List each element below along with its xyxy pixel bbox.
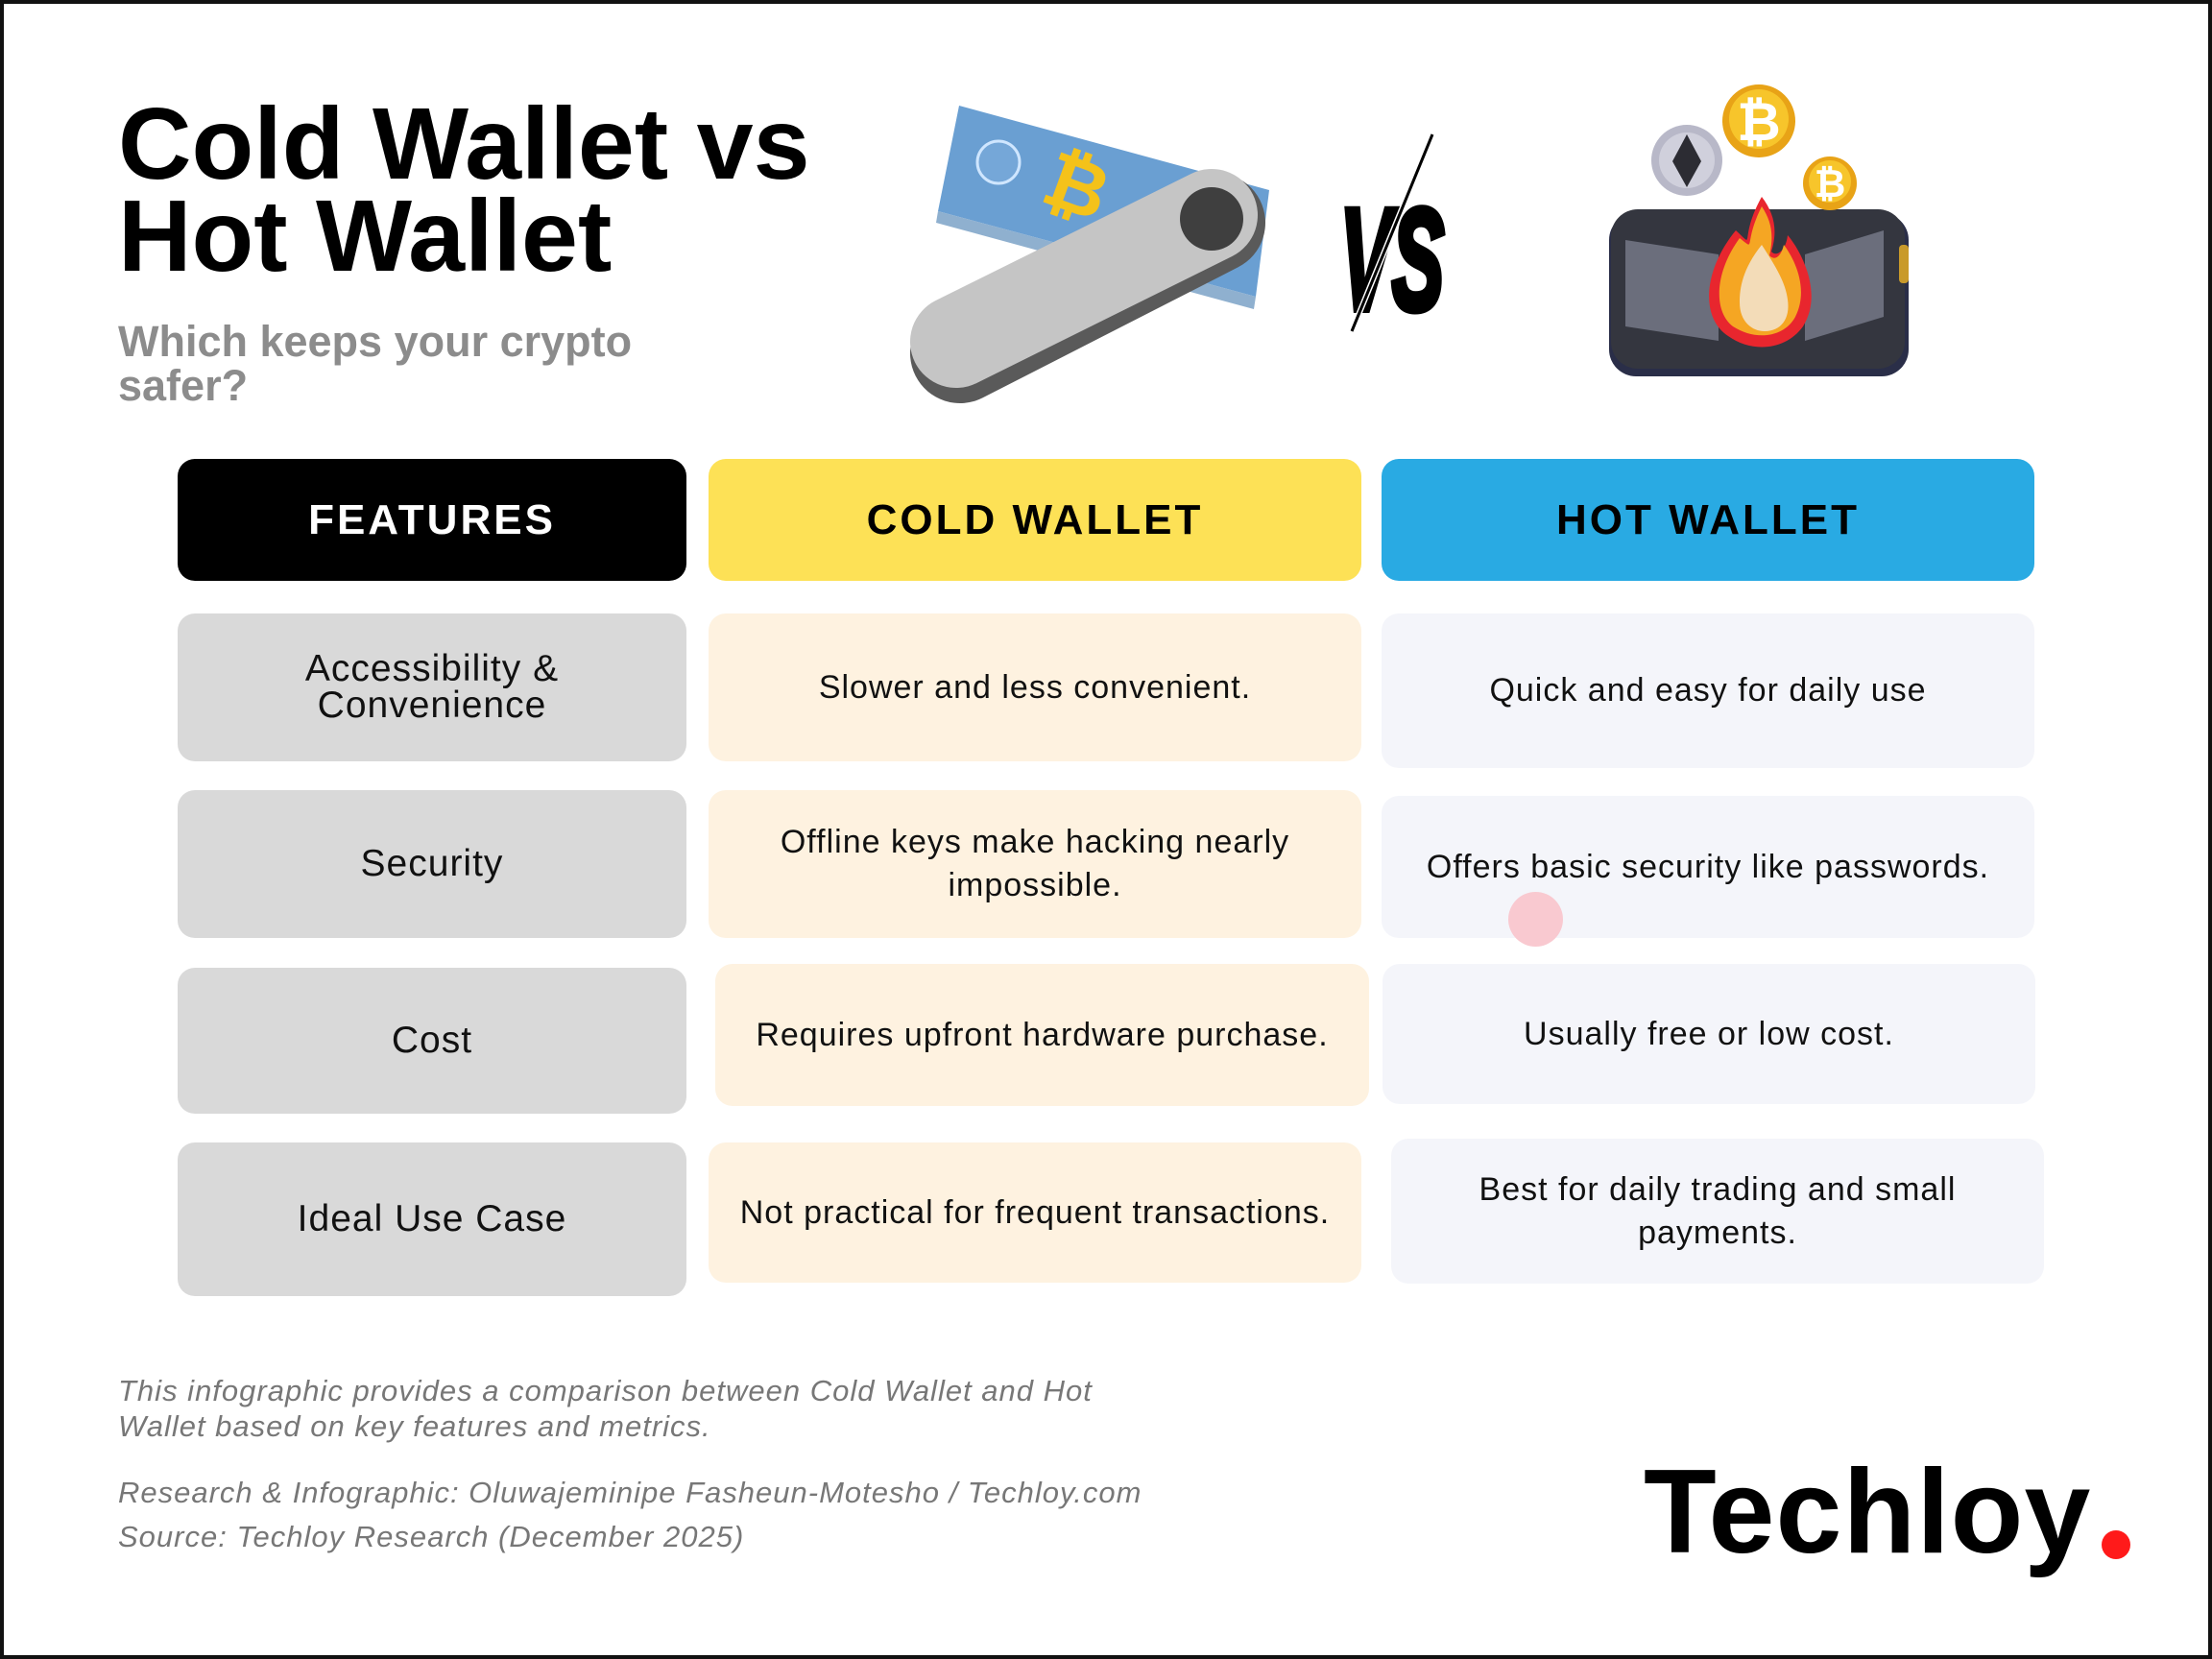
logo: Techloy: Techloy <box>1644 1446 2091 1578</box>
row 4: ideal use case: Ideal Use Case <box>298 1198 566 1239</box>
icon: hardware cold wallet <box>910 106 1269 403</box>
hot cell 1 <box>1382 613 2034 768</box>
row 3: cost <box>178 968 686 1114</box>
subtitle: Which keeps your crypto <box>118 317 632 366</box>
footer credits: Source: Techloy Research (December 2025) <box>118 1520 744 1553</box>
row 2: security: Security <box>361 843 503 884</box>
table header: cold wallet: COLD WALLET <box>867 495 1203 543</box>
hot cell 4 <box>1391 1139 2044 1284</box>
footer description <box>118 1374 1093 1443</box>
table header: cold wallet <box>709 459 1361 581</box>
row 3: cost: Cost <box>392 1020 472 1061</box>
row 1: accessibility: Accessibility & <box>305 648 559 689</box>
cold cell 4 <box>709 1142 1361 1283</box>
footer description: This infographic provides a comparison between Cold Wallet and Hot <box>118 1374 1093 1407</box>
cold cell 4: Not practical for frequent transactions. <box>740 1194 1330 1231</box>
row 1: accessibility <box>178 613 686 761</box>
cold cell 1 <box>709 613 1361 761</box>
title: Cold Wallet vs <box>118 87 810 201</box>
icon: hot wallet <box>1609 84 1909 376</box>
icon: hot wallet: ₿ <box>1737 91 1781 152</box>
hot cell 3: Usually free or low cost. <box>1524 1016 1894 1052</box>
row 1: accessibility: Convenience <box>318 685 546 726</box>
hot cell 1: Quick and easy for daily use <box>1489 672 1927 709</box>
pink dot <box>1508 892 1563 947</box>
table header: features <box>178 459 686 581</box>
cold cell 2 <box>709 790 1361 938</box>
cold cell 2: Offline keys make hacking nearly <box>781 824 1289 860</box>
footer credits <box>118 1476 1142 1553</box>
row 4: ideal use case <box>178 1142 686 1296</box>
subtitle <box>118 317 632 410</box>
hot cell 2 <box>1382 796 2034 938</box>
table header: hot wallet: HOT WALLET <box>1556 495 1860 543</box>
footer description: Wallet based on key features and metrics. <box>118 1409 711 1443</box>
cold cell 3 <box>715 964 1369 1106</box>
subtitle: safer? <box>118 361 248 410</box>
hot cell 3 <box>1382 964 2035 1104</box>
icon: hardware cold wallet: ₿ <box>1033 135 1120 237</box>
cold cell 3: Requires upfront hardware purchase. <box>756 1016 1329 1052</box>
hot cell 4: payments. <box>1638 1214 1797 1250</box>
icon: hot wallet: ₿ <box>1815 163 1845 205</box>
cold cell 2: impossible. <box>948 867 1122 903</box>
logo dot <box>2102 1530 2130 1559</box>
hot cell 2: Offers basic security like passwords. <box>1427 849 1989 885</box>
cold cell 1: Slower and less convenient. <box>819 668 1251 705</box>
table header: features: FEATURES <box>308 495 556 543</box>
hot cell 4: Best for daily trading and small <box>1479 1171 1956 1208</box>
title <box>118 87 810 293</box>
row 2: security <box>178 790 686 938</box>
footer credits: Research & Infographic: Oluwajeminipe Fasheun-Motesho / Techloy.com <box>118 1476 1142 1509</box>
table header: hot wallet <box>1382 459 2034 581</box>
title: Hot Wallet <box>118 180 612 293</box>
